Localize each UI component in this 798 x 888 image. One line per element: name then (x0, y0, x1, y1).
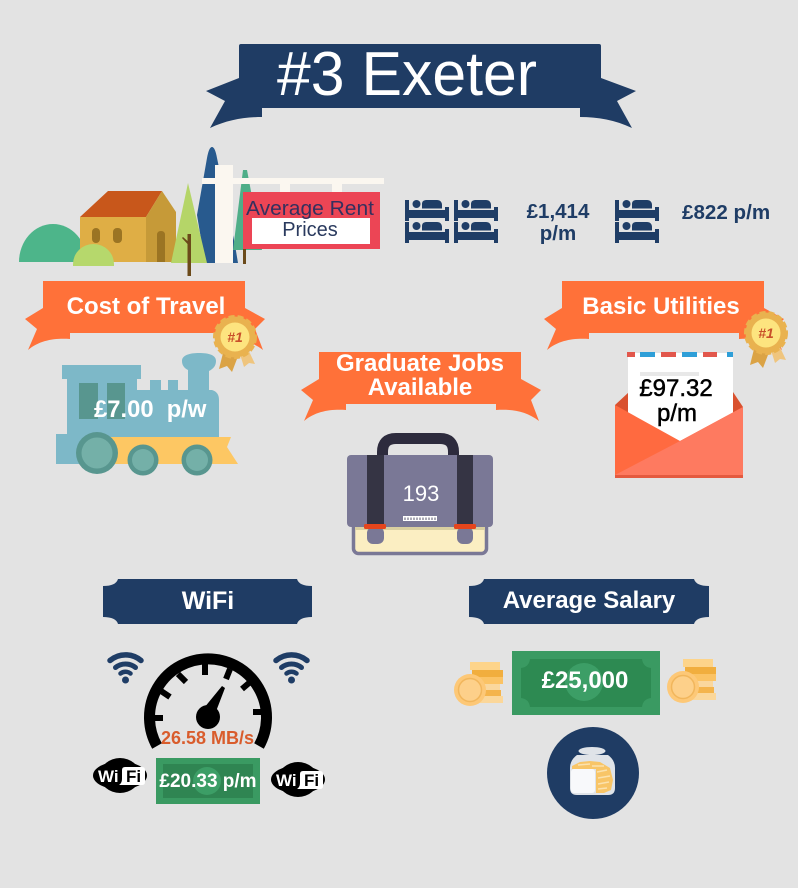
icon: green hill (19, 224, 87, 262)
ribbon heading: Cost of Travel (67, 293, 225, 320)
value: £97.32 p/m (639, 375, 713, 427)
value: 26.58 MB/s: 26.58 MB/s (161, 728, 254, 748)
icon: wifi logo left: Wi (98, 767, 119, 786)
rent sign: Prices (282, 219, 338, 241)
chart: speed gauge (150, 659, 266, 746)
icon: coins right (667, 659, 716, 703)
icon: wifi logo left: Fi (126, 767, 141, 786)
icon: coins left (454, 662, 503, 706)
panel: wifi (93, 579, 325, 804)
ribbon heading: Available (368, 374, 472, 401)
value: £7.00 p/w: £7.00 p/w (94, 396, 207, 423)
icon: light green tree (171, 183, 207, 276)
icon: blue tree (197, 147, 238, 263)
rent: four beds, £1,414 p/m: p/m (540, 222, 576, 245)
value: £97.32 p/m: £97.32 (639, 375, 713, 402)
price: £1,414 p/m: £1,414 (527, 200, 590, 223)
banknote: £25,000: £25,000 (542, 667, 628, 694)
sign post (202, 165, 384, 263)
icon: two beds (615, 200, 659, 243)
title banner: #3 Exeter (277, 40, 537, 109)
value: £97.32 p/m: p/m (657, 400, 697, 427)
ribbon heading (544, 281, 784, 350)
icon: medal: #1 (758, 325, 774, 341)
icon: wifi logo left (93, 758, 147, 793)
icon: wifi logo right: Wi (276, 771, 297, 790)
rent sign: Average Rent (246, 197, 374, 220)
heading banner (469, 579, 709, 624)
rent: two beds, £822 p/m (615, 200, 770, 243)
banknote: £20.33 p/m: £20.33 p/m (159, 771, 257, 792)
panel: average salary (454, 579, 716, 819)
ribbon heading (25, 281, 265, 350)
illustration: house, trees and rent sign (19, 147, 384, 276)
icon: four beds (405, 200, 498, 243)
icon: train (56, 353, 238, 476)
icon: light green bush (73, 244, 114, 266)
banknote: £20.33 p/m (156, 758, 260, 804)
heading banner (103, 579, 312, 624)
icon: medal (214, 316, 256, 372)
icon: savings jar (547, 727, 639, 819)
icon: wifi logo right: Fi (304, 771, 319, 790)
title banner (206, 40, 636, 128)
ribbon heading: Basic Utilities (582, 293, 740, 320)
icon: wifi signal right (276, 655, 307, 684)
icon: envelope with letter (615, 352, 743, 478)
icon: wifi signal left (110, 655, 141, 684)
icon: green tree (233, 170, 262, 264)
banknote: £25,000 (512, 651, 660, 715)
icon: medal: #1 (227, 329, 243, 345)
price: £822 p/m: £822 p/m (682, 201, 770, 224)
rent: four beds, £1,414 p/m (405, 200, 590, 245)
panel: graduate jobs available (301, 350, 541, 554)
icon: briefcase (347, 438, 493, 554)
panel: cost of travel (25, 281, 265, 476)
value: 193: 193 (403, 481, 439, 506)
ribbon heading: Graduate Jobs (336, 350, 504, 377)
panel: basic utilities (544, 281, 786, 478)
icon: medal (746, 312, 786, 368)
heading banner: WiFi (182, 587, 234, 615)
ribbon heading (301, 350, 541, 421)
rent sign (243, 192, 380, 249)
icon: wifi logo right (271, 762, 325, 797)
icon: house (80, 191, 176, 262)
heading banner: Average Salary (503, 587, 676, 614)
